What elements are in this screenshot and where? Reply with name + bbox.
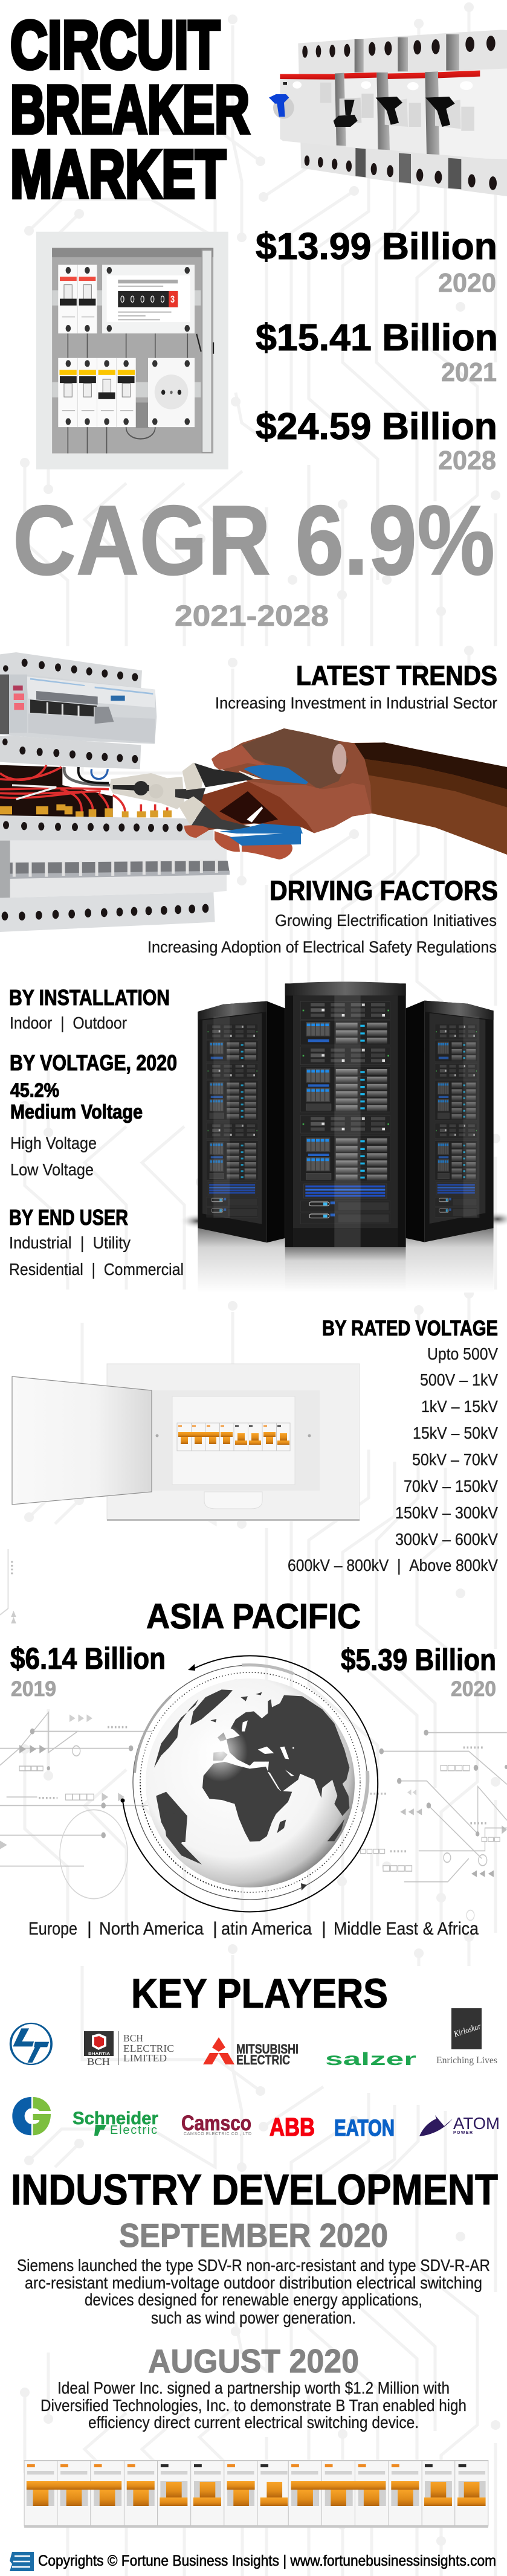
segment: by rated voltage: 1kV – 15kV — [421, 1397, 498, 1416]
development: September 2020: such as wind power generation. — [151, 2308, 356, 2327]
footer: Fortune Business Insights logo — [10, 2552, 34, 2571]
segment: by end user: Industrial | Utility — [9, 1233, 131, 1252]
electric meter: 3 — [170, 294, 175, 305]
logo: Mitsubishi Electric: MITSUBISHI — [236, 2041, 299, 2057]
logos — [11, 2008, 500, 2141]
illustration: row of orange miniature circuit breakers — [24, 2461, 488, 2528]
other regions list: atin America — [221, 1919, 312, 1939]
forearm mid tone — [364, 759, 507, 808]
other regions list: | — [321, 1919, 326, 1939]
logo: Eaton: EATON — [334, 2116, 395, 2141]
logo: ABB: ABB — [270, 2113, 315, 2141]
segment: by rated voltage — [288, 1317, 498, 1575]
logo: Camsco: Camsco — [181, 2112, 251, 2135]
logo: BCH Electric: ELECTRIC — [123, 2043, 174, 2054]
development: September 2020: SEPTEMBER 2020 — [119, 2217, 388, 2254]
market size 2020: 2020 — [438, 268, 496, 298]
segment: by end user — [9, 1205, 184, 1279]
logo: L&T — [11, 2023, 51, 2064]
market size 2020: $13.99 Billion — [256, 226, 497, 268]
forearm upper shadow — [352, 742, 507, 789]
region heading: ASIA PACIFIC — [146, 1597, 361, 1636]
logo: Schneider Electric: Schneider — [73, 2109, 158, 2128]
development: August 2020: Ideal Power Inc. signed a partnership worth $1.2 Million with — [57, 2378, 450, 2397]
segment: by voltage: Medium Voltage — [10, 1100, 143, 1123]
market size 2021 — [256, 317, 498, 387]
electric meter: 0 — [120, 294, 124, 305]
forearm — [350, 742, 507, 855]
other regions list — [28, 1919, 479, 1939]
title line: circuit: CIRCUIT — [10, 7, 220, 83]
segment: by installation — [9, 985, 170, 1032]
market size 2021: 2021 — [441, 358, 497, 387]
logo: Atom Power: POWER — [453, 2131, 473, 2135]
latest trends: Increasing Investment in Industrial Sector — [215, 694, 497, 712]
region value 2020: 2020 — [451, 1677, 496, 1701]
segment: by rated voltage: 500V – 1kV — [420, 1370, 498, 1389]
latest trends — [215, 660, 497, 712]
lower fingers — [184, 825, 292, 859]
region value 2020 — [341, 1643, 496, 1701]
segment: by rated voltage: 15kV – 50kV — [413, 1424, 498, 1442]
continents — [154, 1689, 349, 1842]
logo: Kirloskar: Kirloskar — [453, 2022, 482, 2040]
market size 2021: $15.41 Billion — [256, 317, 498, 359]
driving factors — [147, 875, 498, 956]
other regions list: North America — [99, 1919, 204, 1939]
back of hand — [212, 728, 372, 833]
market size 2028 — [256, 406, 497, 475]
decorative circuit marks around globe: right — [361, 1730, 507, 1920]
electric meter — [102, 265, 195, 333]
development: September 2020: devices designed for renewable energy applications, — [85, 2290, 422, 2309]
other regions list: Europe — [28, 1919, 77, 1939]
orbit rings — [123, 1656, 378, 1912]
segment: by end user: Residential | Commercial — [9, 1260, 184, 1279]
region value 2019: 2019 — [11, 1677, 56, 1701]
electric meter: 0 — [160, 294, 165, 305]
logo: Salzer: salzer — [325, 2049, 417, 2069]
electric meter: 0 — [140, 294, 144, 305]
illustration: open distribution board with meter — [36, 232, 228, 469]
logo: Atom Power: ATOM — [453, 2114, 500, 2133]
rack reflections and floor shadow — [179, 1211, 507, 1293]
forearm and hand — [193, 728, 507, 855]
logo: BCH Electric: LIMITED — [123, 2052, 167, 2064]
electric meter: 0 — [150, 294, 155, 305]
south america (lower part) — [163, 1812, 202, 1865]
pliers — [110, 763, 254, 832]
segment: by voltage — [10, 1050, 177, 1179]
photo: breaker panel with wires and pliers in hand — [0, 652, 507, 932]
right rack — [406, 1001, 494, 1242]
market size 2028: $24.59 Billion — [256, 406, 497, 448]
top two breakers — [58, 265, 97, 333]
segment: by rated voltage: 150kV – 300kV — [395, 1503, 498, 1522]
title line: market: MARKET — [10, 137, 226, 212]
region value 2019 — [10, 1642, 166, 1701]
development: August 2020: efficiency direct current electrical switching device. — [88, 2413, 419, 2432]
logo: Kirloskar — [436, 2008, 497, 2066]
title line: breaker: BREAKER — [10, 72, 250, 147]
segment: by voltage: BY VOLTAGE, 2020 — [10, 1050, 177, 1075]
inner dotted sweep at bottom of globe — [140, 1782, 237, 1891]
segment: by installation: Indoor | Outdoor — [10, 1013, 127, 1032]
miniature breakers row — [177, 1423, 290, 1451]
logo: Schneider Electric: Electric — [110, 2124, 157, 2137]
CAGR period: 2021-2028 — [175, 600, 329, 632]
center rack — [285, 981, 406, 1247]
logo: Camsco: CAMSCO ELECTRIC CO., LTD — [184, 2132, 251, 2136]
logo: CG — [12, 2097, 51, 2135]
other regions list: | — [87, 1919, 92, 1939]
logo: BCH Electric: BHARTIA — [88, 2052, 110, 2056]
title — [10, 7, 250, 212]
breaker panel — [0, 652, 230, 932]
other regions list: | — [213, 1919, 218, 1939]
segment: by rated voltage: 70kV – 150kV — [404, 1477, 498, 1495]
logo: Atom Power — [419, 2114, 500, 2136]
segment: by end user: BY END USER — [9, 1205, 128, 1230]
logo: BCH Electric: BCH — [123, 2032, 143, 2044]
logo: BCH Electric — [84, 2031, 174, 2067]
logo: Kirloskar: Enriching Lives — [436, 2055, 497, 2066]
logo: Mitsubishi Electric: ELECTRIC — [236, 2052, 290, 2067]
segment: by voltage: Low Voltage — [10, 1160, 94, 1179]
development: September 2020 — [17, 2217, 490, 2327]
illustration: three server racks — [179, 981, 507, 1293]
segment: by rated voltage: Upto 500V — [427, 1344, 498, 1363]
globe with orbit rings — [121, 1656, 378, 1912]
market size 2020 — [256, 226, 497, 298]
other regions list: Middle East & Africa — [334, 1919, 479, 1939]
segment: by voltage: 45.2% — [10, 1079, 59, 1101]
illustration: white breaker box with open door — [12, 1364, 360, 1521]
development: August 2020: AUGUST 2020 — [148, 2342, 359, 2380]
driving factors: Growing Electrification Initiatives — [275, 911, 497, 930]
lower four breakers — [58, 358, 136, 427]
key players heading: KEY PLAYERS — [131, 1970, 388, 2017]
development: August 2020 — [40, 2342, 467, 2432]
segment: by voltage: High Voltage — [10, 1134, 97, 1152]
photo: row of four circuit breakers — [269, 30, 507, 196]
decorative circuit marks around globe: left — [0, 1549, 172, 1899]
region value 2019: $6.14 Billion — [10, 1642, 166, 1675]
logo: Schneider Electric — [73, 2109, 158, 2137]
left rack — [198, 1001, 285, 1242]
market size 2028: 2028 — [438, 446, 496, 475]
segment: by installation: BY INSTALLATION — [9, 985, 170, 1010]
electric meter: 0 — [131, 294, 135, 305]
door — [12, 1376, 152, 1505]
segment: by rated voltage: 50kV – 70kV — [412, 1450, 498, 1469]
segment: by rated voltage: 300kV – 600kV — [395, 1530, 498, 1549]
logo: Mitsubishi Electric — [203, 2037, 299, 2067]
blue grips — [219, 765, 308, 834]
logo: BCH Electric: BCH — [87, 2056, 110, 2067]
socket — [148, 358, 195, 427]
